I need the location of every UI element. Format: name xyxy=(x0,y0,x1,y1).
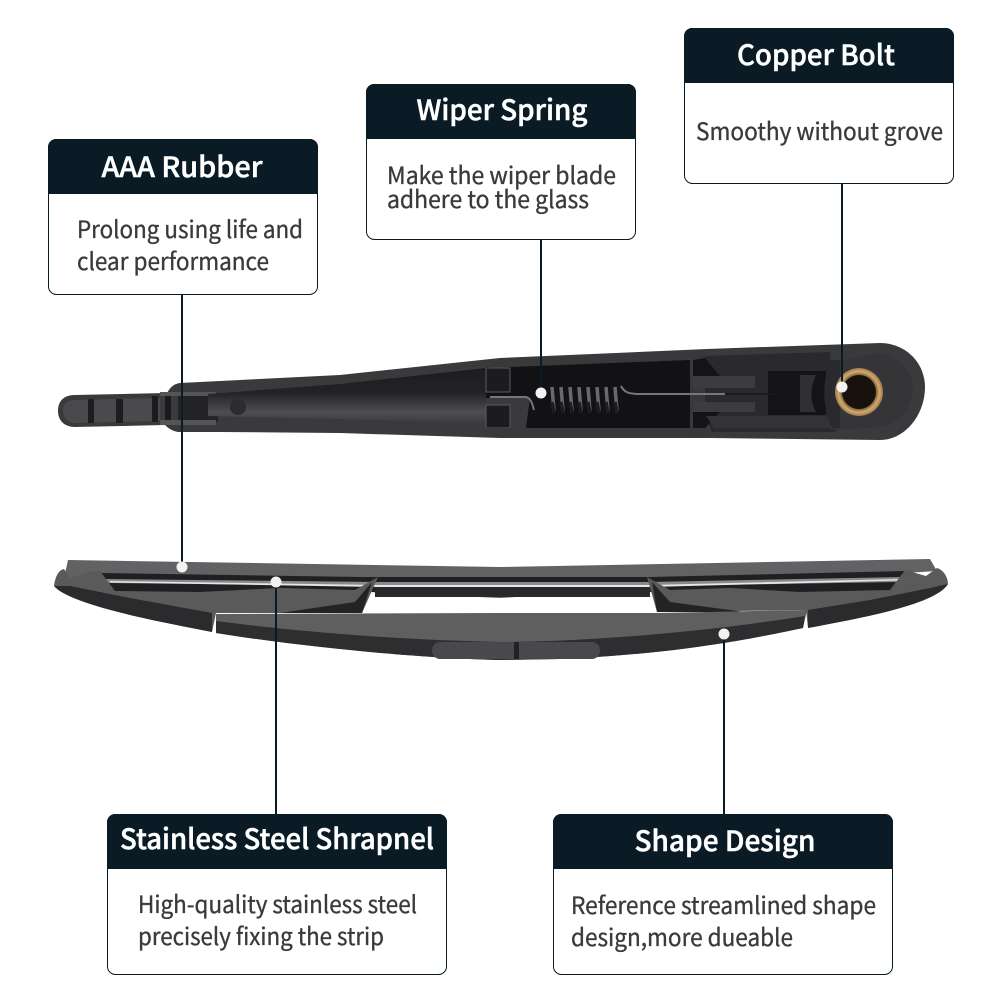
panel: AAA Rubber: AAA Rubber xyxy=(102,146,263,186)
panel: AAA Rubber xyxy=(48,139,318,294)
panel: Wiper Spring: Wiper Spring xyxy=(416,89,588,129)
panel: Copper Bolt xyxy=(684,28,954,184)
center cover xyxy=(216,610,807,660)
panel: Wiper Spring xyxy=(366,84,636,240)
right end piece xyxy=(647,568,948,628)
clip buttons xyxy=(432,642,600,659)
wiper arm xyxy=(58,343,925,440)
leader lines and dots xyxy=(176,184,848,814)
panel: Stainless Steel Shrapnel xyxy=(107,814,447,974)
panel: Shape Design: design,more dueable xyxy=(571,918,793,953)
panel: Shape Design xyxy=(553,814,893,974)
panel: Stainless Steel Shrapnel: Stainless Steel Shrapnel xyxy=(120,818,434,858)
arm inner channel xyxy=(208,368,486,423)
panel: Wiper Spring: adhere to the glass xyxy=(387,180,589,215)
metal spine xyxy=(64,559,937,598)
panel: Stainless Steel Shrapnel: High-quality stainless steel xyxy=(138,885,417,920)
panel: Shape Design: Reference streamlined shape xyxy=(571,886,876,921)
copper bolt xyxy=(835,368,883,416)
left end piece xyxy=(54,569,378,632)
panel: Wiper Spring: Make the wiper blade xyxy=(387,156,616,191)
panel: Shape Design: Shape Design xyxy=(634,820,816,860)
spring xyxy=(490,386,775,413)
panel: AAA Rubber: Prolong using life and xyxy=(77,210,303,245)
panel: Stainless Steel Shrapnel: precisely fixing the strip xyxy=(138,917,384,952)
panel: Copper Bolt: Copper Bolt xyxy=(737,34,895,74)
panel: Copper Bolt: Smoothy without grove xyxy=(696,112,943,147)
arm tip detail xyxy=(63,392,218,425)
wiper blade xyxy=(54,559,948,660)
arm clip mechanism xyxy=(690,351,913,438)
panel: AAA Rubber: clear performance xyxy=(77,242,269,277)
